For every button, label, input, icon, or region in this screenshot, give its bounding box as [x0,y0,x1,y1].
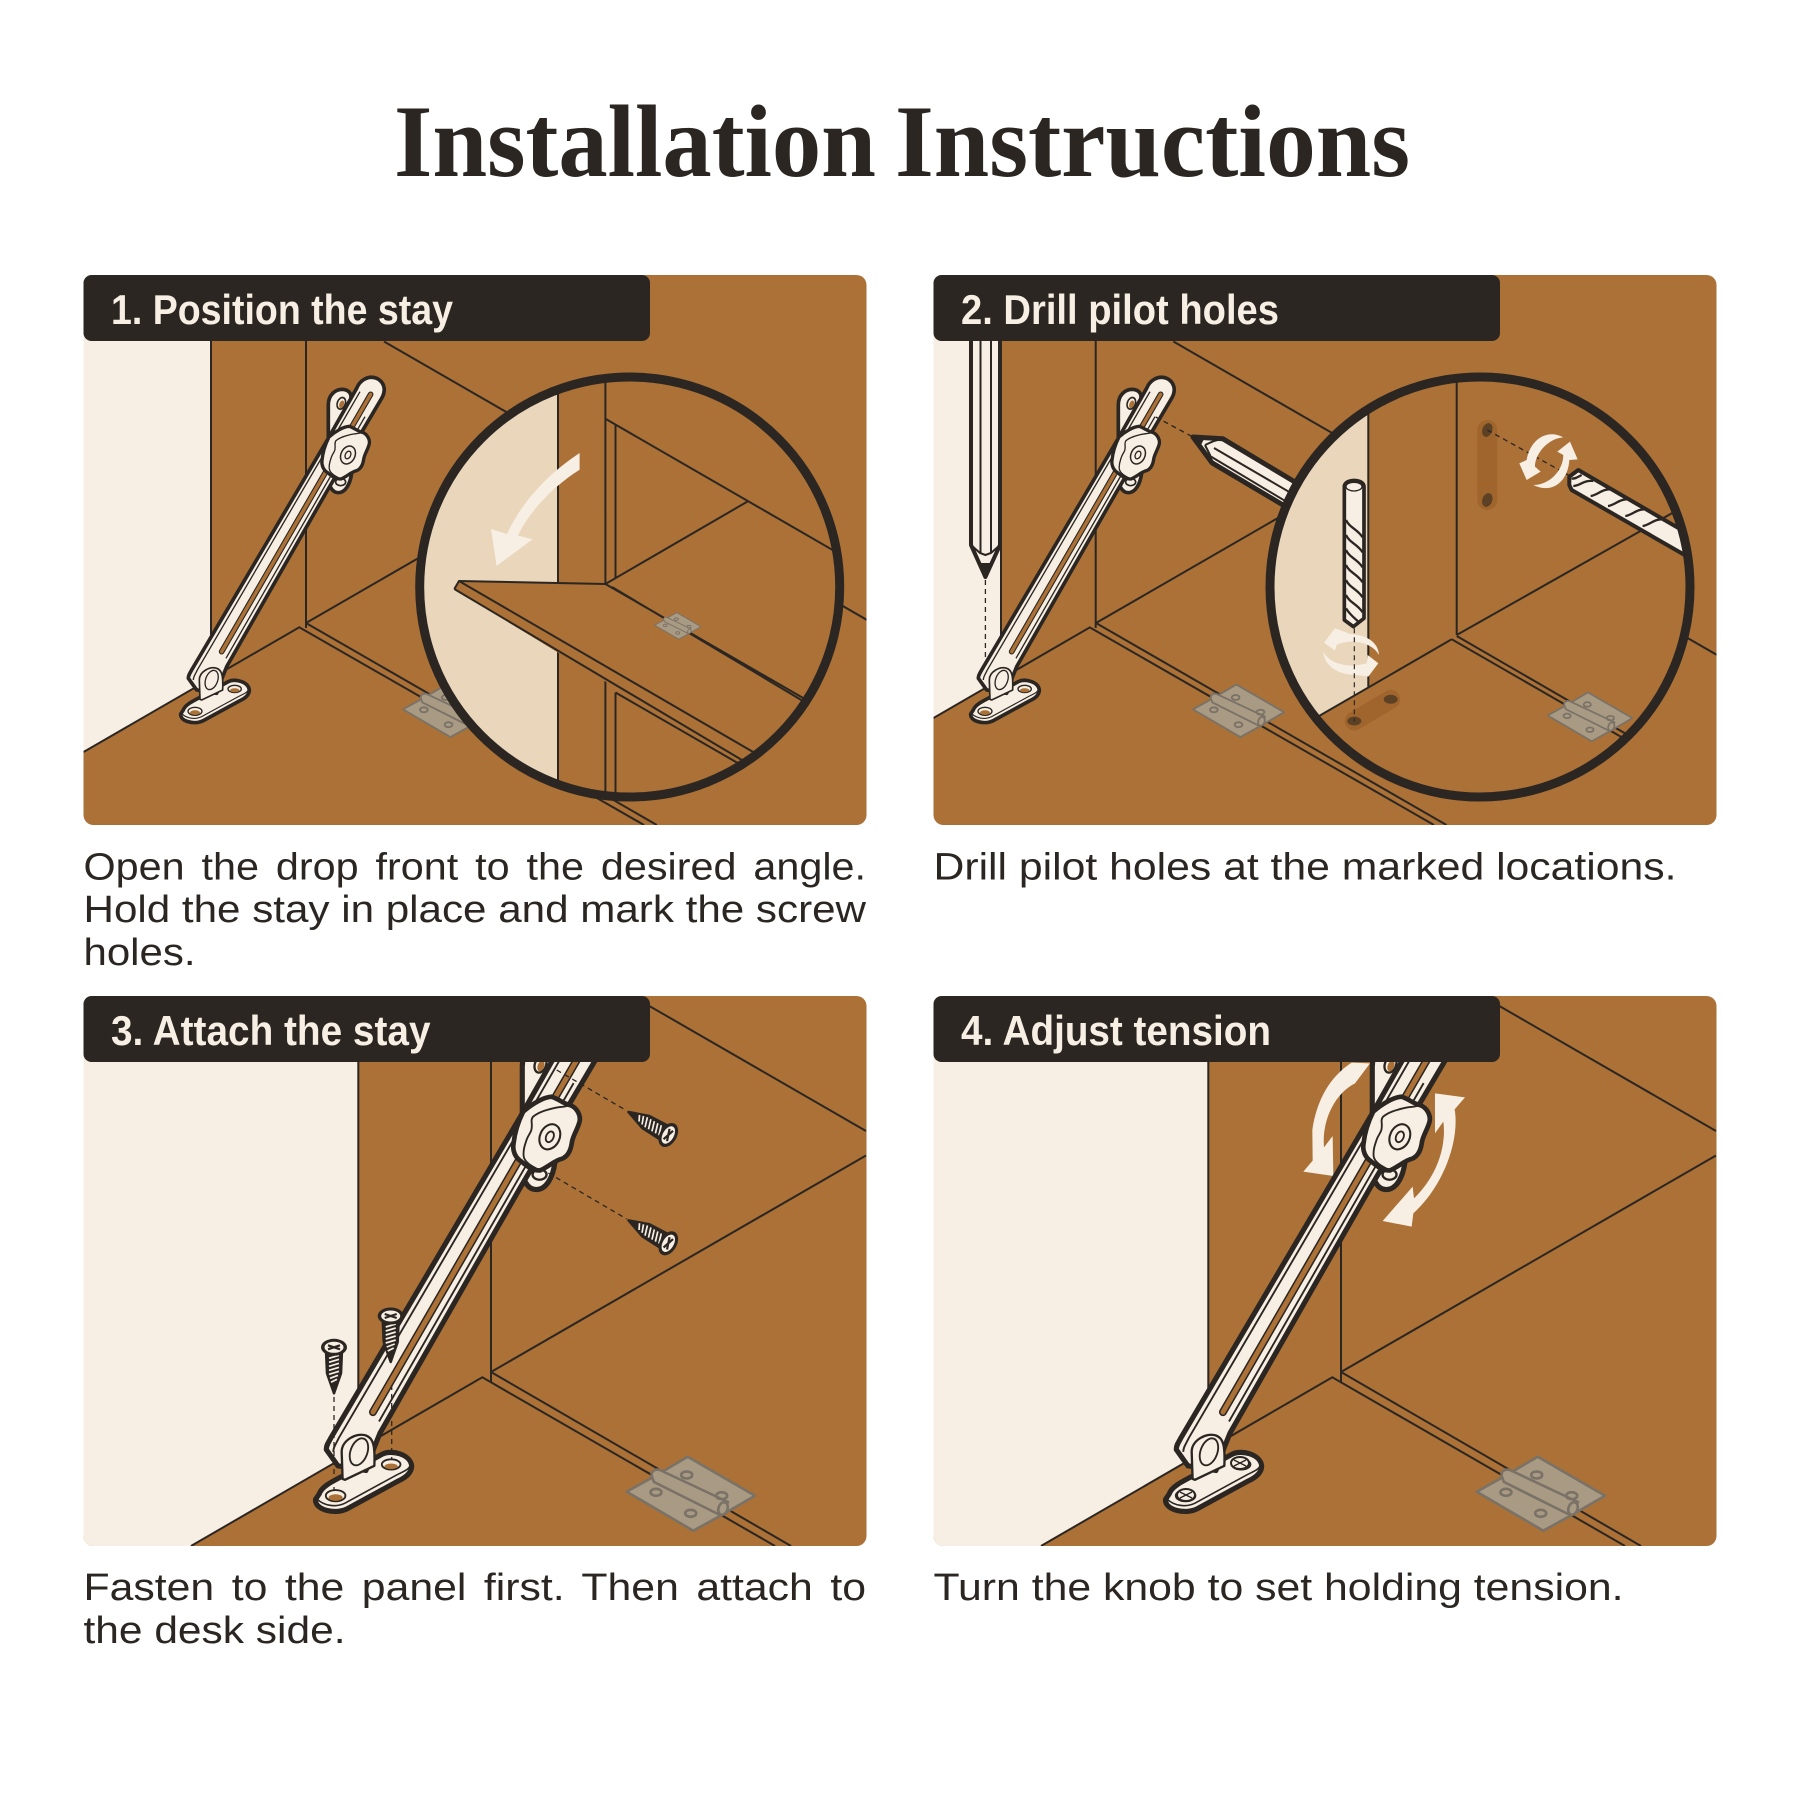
illustration: attach the stay [84,996,866,1546]
text: step 3 description [84,1567,866,1652]
text: step 4 description: Turn the knob to set holding tension. [934,1567,1624,1609]
title: Instructions [895,85,1410,199]
header: step 2 [934,275,1500,341]
icon: angled pencil [1190,434,1295,507]
magnifier detail [415,372,844,802]
icon: hinge [627,1457,755,1531]
icon: vertical pencil [971,300,1000,577]
panel: step 2 [934,275,1717,888]
icon: screw [627,1219,678,1256]
icon: lid stay [971,377,1174,723]
header: step 4 [934,996,1500,1062]
icon: hinge [1477,1457,1605,1531]
panel: step 4 [934,996,1716,1609]
icon: lid stay [316,1028,601,1511]
icon: lid stay [1166,1028,1451,1511]
desk side wall [84,1054,358,1546]
desk side wall [934,1054,1208,1546]
magnifier detail [1260,370,1700,810]
illustration: adjust tension [934,996,1716,1546]
header: step 1 [84,275,650,341]
icon: screw [378,1308,404,1362]
header: step 3 [84,996,650,1062]
vertical drill bit and rotation [1323,480,1379,722]
header: step 3: 3. Attach the stay [111,1007,431,1054]
icon: hinge [1193,685,1284,737]
desk side wall [934,334,1000,717]
icon: fitted screws [1177,1457,1249,1501]
icon: hinge [402,687,468,738]
text: step 1 description: Hold the stay in place and mark the screw [84,889,867,931]
illustration: position the stay [84,275,867,825]
icon: small hinge [655,613,701,639]
text: step 3 description: Fasten to the panel first. Then attach to [84,1567,866,1609]
arrow: lower the drop front [491,453,580,566]
panel: step 1 [84,275,867,974]
icon: hinge in magnifier [1548,692,1632,741]
header: step 4: 4. Adjust tension [961,1007,1271,1054]
title: Installation [394,85,876,199]
icon: lid stay [181,377,384,723]
floor pilot mark [1347,695,1398,726]
header: step 2: 2. Drill pilot holes [961,286,1279,333]
arrows: turn the knob [1303,1063,1465,1227]
header: step 1: 1. Position the stay [111,286,454,333]
text: step 2 description: Drill pilot holes at the marked locations. [934,846,1676,888]
title [394,85,1410,199]
angled drill bit and rotation [1519,434,1693,560]
wall pilot mark [1480,422,1494,508]
text: step 1 description: Open the drop front to the desired angle. [84,846,866,888]
desk side wall [84,334,210,751]
icon: screw [321,1339,347,1393]
panel: step 3 [84,996,866,1652]
text: step 3 description: the desk side. [84,1610,346,1652]
icon: screw [627,1110,678,1147]
text: step 1 description [84,846,867,974]
text: step 1 description: holes. [84,932,196,974]
illustration: drill pilot holes [934,275,1717,825]
